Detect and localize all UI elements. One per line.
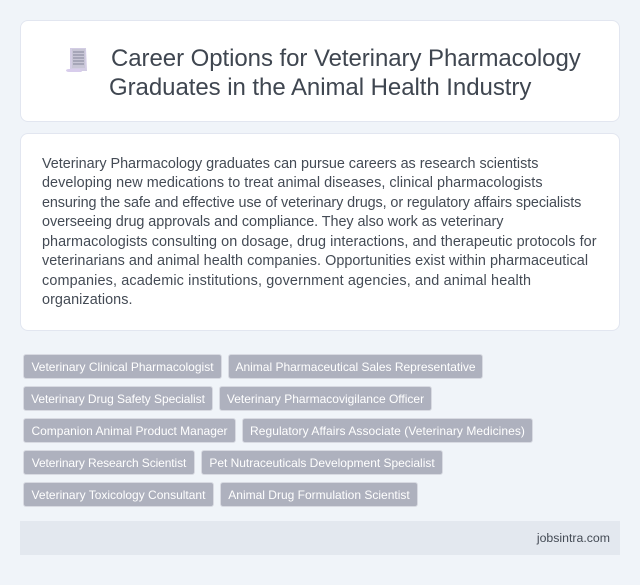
tag: Animal Pharmaceutical Sales Representative xyxy=(235,360,476,374)
tag: Companion Animal Product Manager xyxy=(31,424,228,438)
tag: Animal Drug Formulation Scientist xyxy=(228,488,410,502)
tag xyxy=(23,418,236,443)
text block: description: pharmacologists consulting on dosage, drug interactions, and therapeutic protocols for xyxy=(42,234,597,250)
tag xyxy=(23,482,214,507)
tag: Veterinary Research Scientist xyxy=(32,456,186,470)
tag xyxy=(228,354,483,379)
text block: description: Veterinary Pharmacology graduates can pursue careers as research scientists xyxy=(42,156,538,172)
tag xyxy=(23,354,222,379)
text block: description: companies, academic institutions, government agencies, and animal health xyxy=(42,273,531,289)
tag xyxy=(242,418,533,443)
title xyxy=(109,45,581,101)
tag xyxy=(23,450,195,475)
tag xyxy=(220,482,418,507)
title: Graduates in the Animal Health Industry xyxy=(109,74,531,101)
text block: description: overseeing drug approvals and compliance. They also work as veterinary xyxy=(42,214,503,230)
tag: Veterinary Pharmacovigilance Officer xyxy=(227,392,424,406)
panel: description xyxy=(20,133,620,331)
footer source text: jobsintra.com xyxy=(537,531,610,545)
tag xyxy=(219,386,432,411)
icon: document scroll xyxy=(66,48,87,72)
tag: Pet Nutraceuticals Development Specialist xyxy=(209,456,435,470)
text block: description: organizations. xyxy=(42,292,133,308)
tag: Veterinary Clinical Pharmacologist xyxy=(31,360,214,374)
text block: description: ensuring the safe and effective use of veterinary drugs, or regulatory affairs specialists xyxy=(42,195,581,211)
tag: Regulatory Affairs Associate (Veterinary Medicines) xyxy=(250,424,525,438)
tag xyxy=(23,386,213,411)
text block: description: developing new medications to treat animal diseases, clinical pharmacologists xyxy=(42,175,543,191)
tag xyxy=(201,450,443,475)
tag: Veterinary Toxicology Consultant xyxy=(32,488,205,502)
title: Career Options for Veterinary Pharmacology xyxy=(111,45,581,72)
tag list xyxy=(23,354,533,507)
panel: title card xyxy=(20,20,620,122)
text block: description: veterinarians and animal health companies. Opportunities exist within pharmaceutical xyxy=(42,253,588,269)
tag: Veterinary Drug Safety Specialist xyxy=(31,392,205,406)
text block: description xyxy=(42,156,597,308)
footer bar xyxy=(20,521,620,555)
